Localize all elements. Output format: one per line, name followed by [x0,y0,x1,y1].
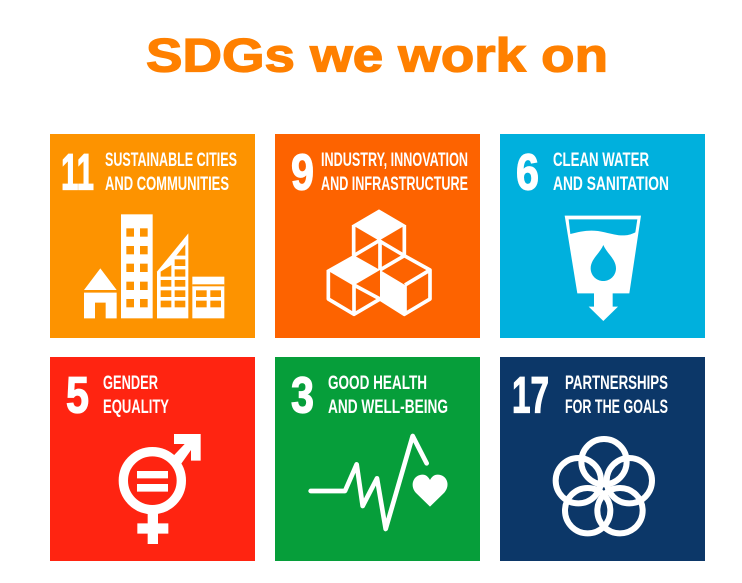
heading: gender equality: EQUALITY [103,397,169,418]
icon: stacked cubes [327,209,430,314]
panel: SDG 17 [500,357,705,561]
heading: gender equality [103,373,169,418]
heading: good health and well-being: AND WELL-BEING [328,397,448,418]
heading: partnerships for the goals: FOR THE GOALS [565,397,668,418]
title: SDGs we work on [146,28,608,82]
icon: five linked rings [556,439,652,533]
number 17: 17 [512,366,549,424]
heading: partnerships for the goals: PARTNERSHIPS [565,373,668,394]
panel: SDG 3 [275,357,480,561]
heading: clean water and sanitation: AND SANITATION [553,174,669,195]
panel: SDG 6 [500,134,705,338]
heading: clean water and sanitation: CLEAN WATER [553,150,649,171]
icon: heartbeat line and heart [311,436,448,529]
heading: industry, innovation and infrastructure: AND INFRASTRUCTURE [321,174,468,195]
heading: clean water and sanitation [553,150,669,195]
heading: sustainable cities and communities: SUSTAINABLE CITIES [105,150,237,171]
heading: sustainable cities and communities [105,150,237,195]
number 9: 9 [291,144,314,200]
number 5: 5 [66,366,89,424]
heading: sustainable cities and communities: AND COMMUNITIES [105,174,229,195]
panel: SDG 9 [275,134,480,338]
heading: industry, innovation and infrastructure [321,150,468,195]
heading: industry, innovation and infrastructure: INDUSTRY, INNOVATION [321,150,468,171]
icon: city buildings [84,214,224,318]
heading: gender equality: GENDER [103,373,158,394]
icon: gender equality symbol [123,434,201,544]
number 3: 3 [291,366,314,424]
number 11: 11 [61,144,94,200]
heading: partnerships for the goals [565,373,668,418]
heading: good health and well-being [328,373,448,418]
panel: SDG 11 [50,134,255,338]
icon: water glass with drop [565,216,641,321]
heading: good health and well-being: GOOD HEALTH [328,373,427,394]
number 6: 6 [516,144,539,200]
panel: SDG 5 [50,357,255,561]
